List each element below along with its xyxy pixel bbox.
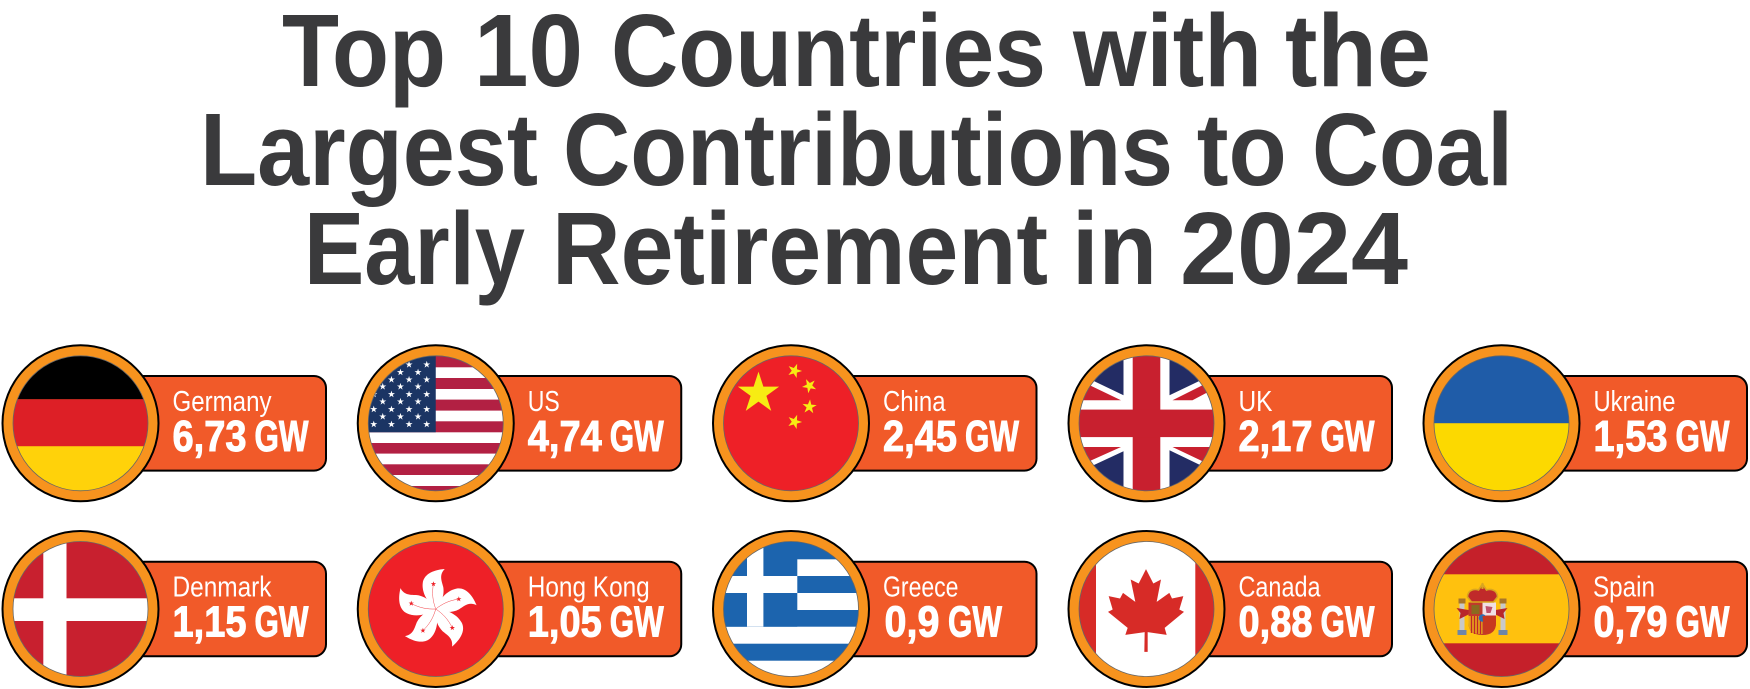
value: 0,79 (1594, 599, 1668, 647)
label panel (791, 562, 1036, 656)
label panel (436, 376, 681, 471)
value: GW (1676, 599, 1730, 647)
label panel (791, 376, 1036, 471)
flag: Spain (1432, 539, 1572, 679)
title: Contributions (563, 92, 1173, 207)
flag: Germany (10, 353, 150, 493)
value (1594, 599, 1730, 647)
value (528, 413, 664, 461)
country name: Hong Kong (528, 572, 650, 604)
label panel (80, 562, 326, 656)
value: GW (610, 413, 664, 461)
value: 4,74 (528, 413, 602, 461)
card: Spain (1424, 531, 1747, 687)
value: 1,15 (172, 599, 246, 647)
value (172, 413, 309, 461)
title: in (1072, 191, 1157, 306)
flag: UK (1079, 356, 1214, 490)
flag: Canada (1076, 539, 1216, 679)
card: Greece (713, 531, 1036, 687)
country name: Germany (172, 386, 272, 418)
medallion ring (2, 531, 158, 687)
flag: Ukraine (1432, 353, 1572, 493)
country name: Canada (1238, 572, 1321, 604)
medallion ring (358, 345, 514, 501)
title: Largest (200, 92, 538, 207)
card: Denmark (2, 531, 326, 687)
value (172, 599, 309, 647)
value: 0,88 (1238, 599, 1312, 647)
card: Germany (2, 345, 326, 501)
card: China (713, 345, 1036, 501)
label panel (1502, 376, 1747, 471)
title: to (1197, 92, 1287, 207)
card: US (358, 345, 681, 501)
flag: Denmark (10, 539, 150, 679)
country name: Greece (883, 572, 958, 604)
flag: China (721, 353, 861, 493)
label panel (1146, 562, 1392, 656)
value (1238, 599, 1375, 647)
value: GW (254, 599, 309, 647)
flag: US (366, 353, 506, 494)
title (200, 0, 1513, 306)
card: Ukraine (1424, 345, 1747, 501)
country name: China (883, 386, 946, 418)
flag: Hong Kong (366, 539, 506, 679)
value (1594, 413, 1730, 461)
card: Canada (1068, 531, 1392, 687)
flag: Greece (721, 539, 861, 679)
country name: Spain (1593, 572, 1655, 604)
medallion ring (1068, 345, 1224, 501)
value: GW (1320, 599, 1375, 647)
coat of arms (1456, 583, 1508, 635)
label panel (1502, 562, 1747, 656)
title: 2024 (1180, 191, 1408, 306)
medallion ring (713, 345, 869, 501)
value: 1,05 (528, 599, 602, 647)
value: 6,73 (172, 413, 246, 461)
country name: Denmark (172, 572, 272, 604)
country name: Ukraine (1594, 386, 1676, 418)
value: 1,53 (1594, 413, 1668, 461)
medallion ring (1068, 531, 1224, 687)
title: Retirement (552, 191, 1048, 306)
medallion ring (358, 531, 514, 687)
value (1238, 413, 1375, 461)
value: GW (1676, 413, 1730, 461)
value: GW (948, 599, 1003, 647)
card: Hong Kong (358, 531, 681, 687)
value: GW (1320, 413, 1375, 461)
value (884, 599, 1003, 647)
label panel (1146, 376, 1392, 471)
label panel (436, 562, 681, 656)
title: Early (304, 191, 525, 306)
label panel (80, 376, 326, 471)
value (528, 599, 664, 647)
value: 0,9 (884, 599, 940, 647)
medallion ring (713, 531, 869, 687)
value: 2,17 (1238, 413, 1312, 461)
title: Coal (1312, 92, 1513, 207)
medallion ring (1424, 345, 1580, 501)
country name: UK (1238, 386, 1272, 418)
medallion ring (2, 345, 158, 501)
medallion ring (1424, 531, 1580, 687)
value: 2,45 (883, 413, 957, 461)
country name: US (528, 386, 560, 418)
value (883, 413, 1020, 461)
value: GW (965, 413, 1020, 461)
value: GW (254, 413, 309, 461)
value: GW (610, 599, 664, 647)
card: UK (1066, 343, 1392, 503)
